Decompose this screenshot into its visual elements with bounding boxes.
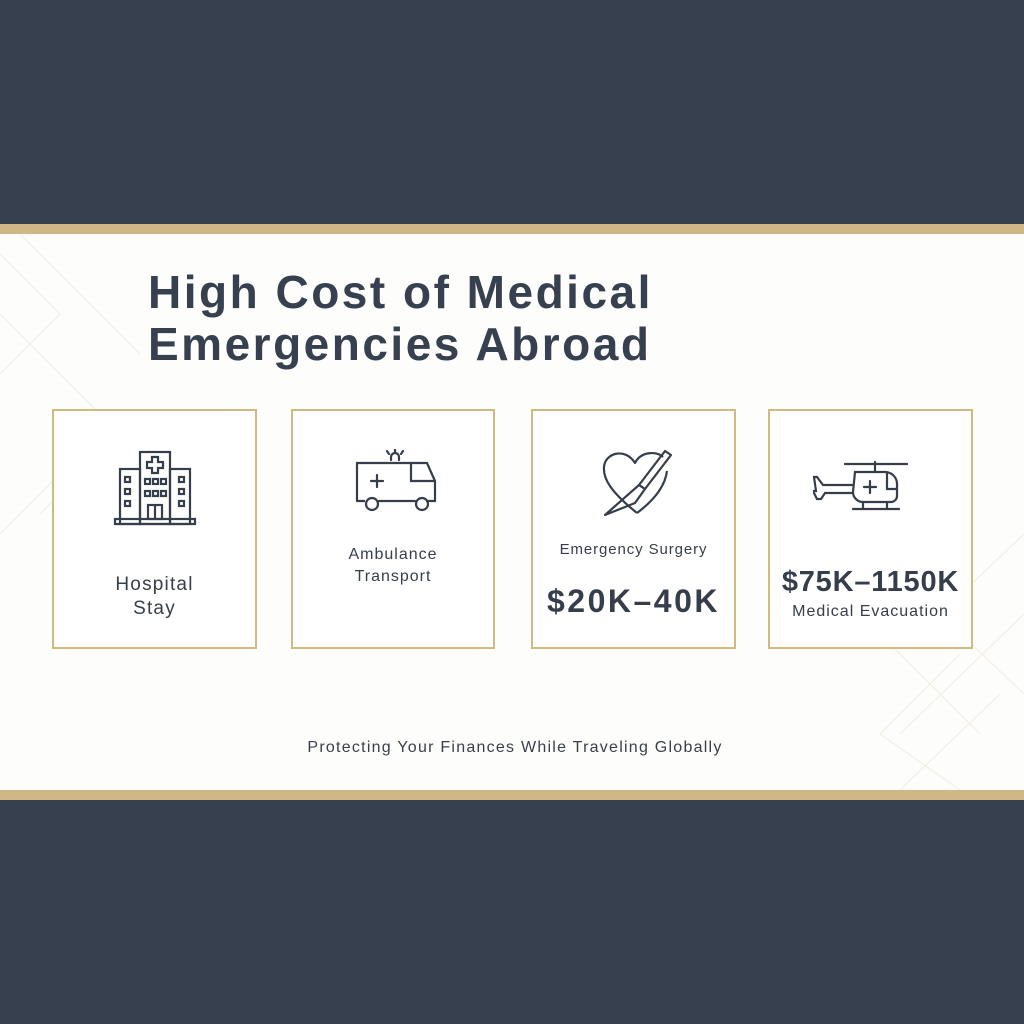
card: medical evacuation bbox=[768, 409, 973, 649]
cost: $20K–40K bbox=[547, 583, 720, 619]
card: emergency surgery bbox=[531, 409, 736, 649]
title: Emergencies Abroad bbox=[148, 318, 651, 370]
label: Medical Evacuation bbox=[792, 603, 949, 620]
icon: ambulance bbox=[356, 449, 436, 512]
bottom gold band bbox=[0, 790, 1024, 800]
white content panel bbox=[0, 234, 1024, 790]
label: Transport bbox=[355, 568, 431, 585]
label: Ambulance bbox=[348, 546, 438, 563]
label bbox=[348, 546, 438, 585]
icon: helicopter bbox=[813, 461, 908, 510]
label: Emergency Surgery bbox=[560, 541, 707, 558]
label bbox=[115, 574, 194, 619]
label: Hospital bbox=[115, 574, 194, 595]
title: High Cost of Medical bbox=[148, 266, 653, 318]
footer tagline: Protecting Your Finances While Traveling Globally bbox=[307, 739, 723, 756]
label: Stay bbox=[133, 598, 176, 619]
card: hospital stay bbox=[52, 409, 257, 649]
top gold band bbox=[0, 224, 1024, 234]
cost: $75K–1150K bbox=[782, 566, 959, 598]
icon: heart with scalpel bbox=[602, 450, 672, 516]
card: ambulance bbox=[291, 409, 495, 649]
title bbox=[148, 266, 653, 370]
icon: hospital bbox=[114, 450, 196, 526]
